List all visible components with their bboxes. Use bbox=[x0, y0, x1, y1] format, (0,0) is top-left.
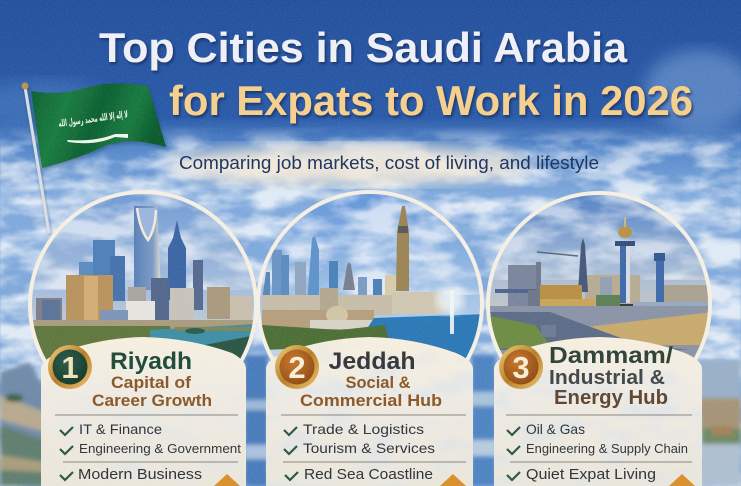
Riyadh lifestyle list: Modern Business bbox=[78, 466, 202, 483]
mid-rise district bbox=[262, 295, 392, 315]
Jeddah heading bbox=[300, 348, 442, 410]
Riyadh sectors list: Engineering & Government bbox=[79, 441, 241, 456]
Riyadh rank badge bbox=[48, 345, 92, 389]
icon: Dammam diamond bbox=[669, 474, 695, 486]
refinery bbox=[508, 265, 536, 306]
Dammam card bbox=[494, 337, 702, 486]
second tower bbox=[654, 253, 665, 302]
Dammam heading: Dammam/ bbox=[549, 342, 674, 368]
Dammam rank badge: 3 bbox=[512, 350, 530, 385]
Jeddah sectors list bbox=[284, 421, 435, 456]
Jeddah sectors list: Trade & Logistics bbox=[303, 421, 424, 437]
green and pipeline bbox=[596, 295, 620, 306]
panel: Riyadh bbox=[28, 190, 258, 486]
Dammam sectors list: Oil & Gas bbox=[526, 421, 585, 437]
flag of Saudi Arabia bbox=[21, 82, 166, 233]
Jeddah heading: Commercial Hub bbox=[300, 391, 442, 410]
Dammam heading: Energy Hub bbox=[554, 387, 668, 409]
Dammam heading: Industrial & bbox=[549, 367, 665, 389]
background: desert landscape left bbox=[0, 362, 50, 486]
subtitle: Comparing job markets, cost of living, and lifestyle bbox=[179, 153, 599, 173]
road and ground bbox=[490, 306, 708, 358]
flag calligraphy: لا إله إلا الله محمد رسول الله bbox=[58, 109, 129, 130]
Riyadh heading: Riyadh bbox=[110, 348, 192, 375]
red sea bbox=[368, 314, 480, 358]
low white building bbox=[126, 301, 155, 320]
title line 2: for Expats to Work in 2026 bbox=[169, 77, 693, 124]
Kingdom Tower bbox=[134, 206, 161, 290]
blue towers bbox=[93, 240, 115, 275]
fountain bbox=[436, 286, 464, 334]
title bbox=[99, 24, 693, 124]
Dammam industrial skyline image bbox=[486, 191, 712, 360]
Dammam heading bbox=[549, 342, 674, 409]
lattice tower bbox=[578, 238, 588, 292]
Riyadh sectors list bbox=[60, 421, 241, 456]
Jeddah rank badge: 2 bbox=[288, 350, 306, 385]
Jeddah lifestyle list: Red Sea Coastline bbox=[304, 466, 433, 483]
flag cloth bbox=[31, 83, 166, 168]
Riyadh heading: Career Growth bbox=[92, 391, 212, 410]
icon: Jeddah diamond bbox=[440, 474, 466, 486]
Riyadh sectors list: IT & Finance bbox=[79, 421, 162, 437]
ground and water bbox=[30, 320, 256, 330]
Jeddah heading: Jeddah bbox=[328, 348, 416, 375]
crane bbox=[537, 252, 578, 256]
clock tower bbox=[396, 206, 409, 291]
Dammam rank badge bbox=[499, 345, 543, 389]
Riyadh rank badge: 1 bbox=[61, 350, 79, 385]
main tower bbox=[615, 217, 635, 306]
Riyadh skyline image bbox=[28, 190, 257, 362]
golden building bbox=[540, 285, 582, 299]
Dammam sectors list: Engineering & Supply Chain bbox=[526, 441, 688, 456]
Riyadh heading bbox=[92, 348, 212, 410]
Dammam lifestyle list: Quiet Expat Living bbox=[526, 466, 656, 483]
Jeddah card bbox=[266, 337, 473, 486]
panel: Dammam bbox=[486, 190, 712, 486]
flagpole bbox=[21, 82, 49, 233]
icon: Riyadh diamond bbox=[214, 474, 240, 486]
title line 1: Top Cities in Saudi Arabia bbox=[99, 24, 628, 71]
Jeddah skyline image bbox=[257, 190, 484, 361]
Riyadh card bbox=[41, 337, 246, 486]
Dammam sectors list bbox=[507, 421, 688, 456]
domed low building bbox=[262, 310, 374, 330]
panel: Jeddah bbox=[256, 190, 486, 486]
Jeddah sectors list: Tourism & Services bbox=[303, 440, 435, 456]
tan tower bbox=[66, 275, 113, 321]
Jeddah heading: Social & bbox=[346, 373, 410, 392]
Jeddah rank badge bbox=[275, 345, 319, 389]
background: water gaps between cards bbox=[244, 355, 496, 486]
Riyadh heading: Capital of bbox=[111, 373, 191, 392]
distant skyline bbox=[585, 275, 640, 305]
glass towers bbox=[262, 272, 270, 295]
mid buildings bbox=[128, 287, 146, 301]
background: desert town right bbox=[700, 360, 741, 486]
flag sword bbox=[67, 134, 128, 143]
